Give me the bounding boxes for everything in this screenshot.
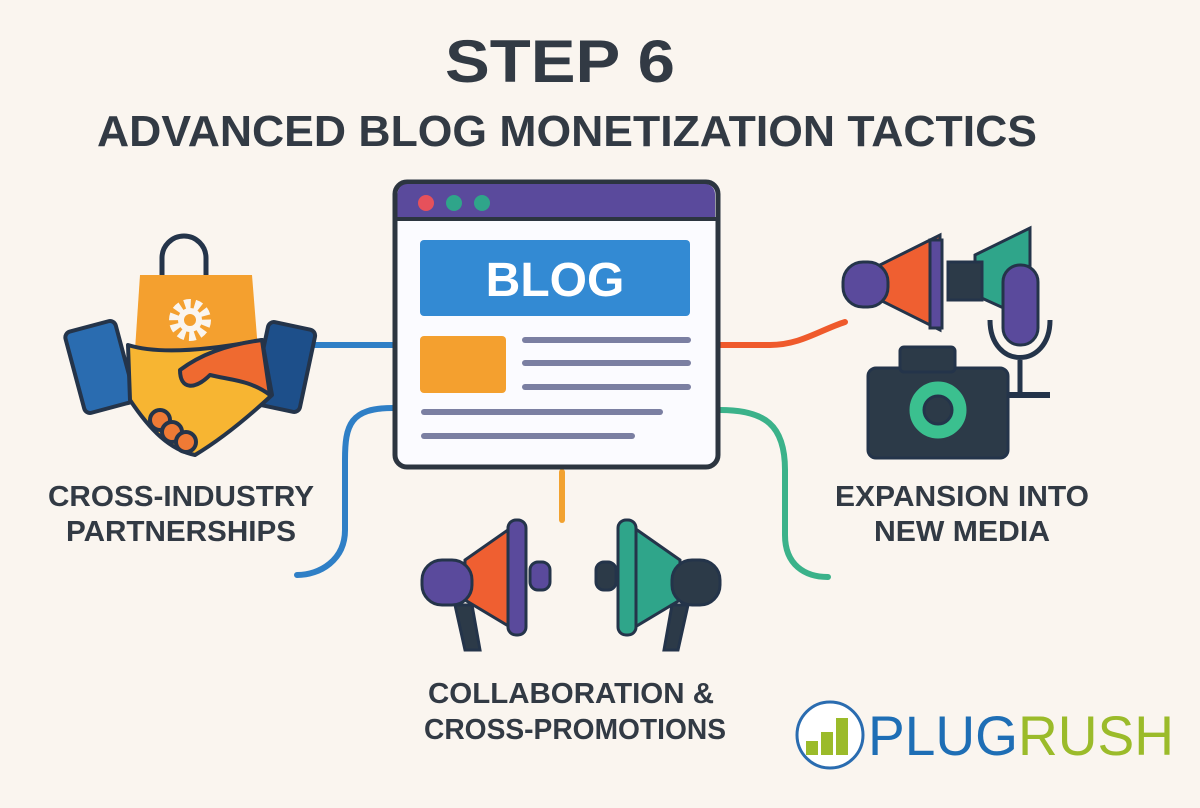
icon: two megaphones bbox=[422, 520, 720, 650]
label: cross-industry partnerships bbox=[48, 481, 314, 548]
label: expansion into new media: EXPANSION INTO bbox=[835, 481, 1089, 513]
label: expansion into new media: NEW MEDIA bbox=[874, 516, 1050, 548]
icon: handshake with shopping bag bbox=[64, 236, 316, 455]
blog window bbox=[395, 182, 718, 467]
label: expansion into new media bbox=[835, 481, 1089, 548]
label: cross-industry partnerships: CROSS-INDUSTRY bbox=[48, 481, 314, 513]
label: collaboration & cross-promotions: CROSS-PROMOTIONS bbox=[424, 714, 726, 746]
logo: plugrush: PLUGRUSH bbox=[868, 704, 1174, 767]
blog banner bbox=[420, 240, 690, 316]
connector lines bbox=[297, 322, 845, 577]
label: collaboration & cross-promotions: COLLABORATION & bbox=[428, 678, 714, 710]
title bbox=[97, 28, 1037, 156]
blog banner: BLOG bbox=[486, 254, 624, 307]
title: STEP 6 bbox=[445, 28, 675, 95]
label: collaboration & cross-promotions bbox=[424, 678, 726, 746]
title: ADVANCED BLOG MONETIZATION TACTICS bbox=[97, 107, 1037, 156]
icon: media group (megaphones, mic, camera) bbox=[843, 228, 1050, 458]
label: cross-industry partnerships: PARTNERSHIPS bbox=[66, 516, 296, 548]
